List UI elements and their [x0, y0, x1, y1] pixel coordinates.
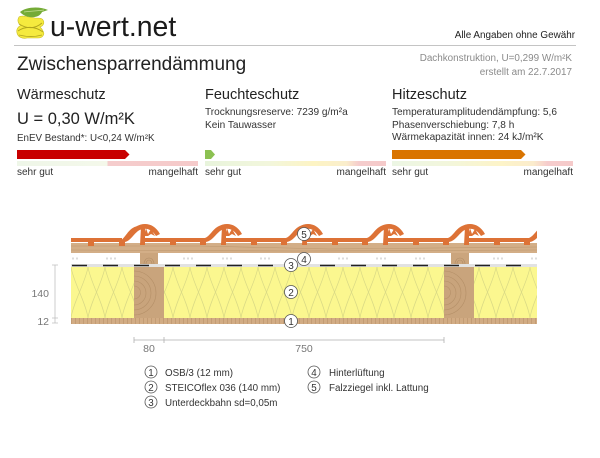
- label: sehr gut: sehr gut: [17, 167, 53, 178]
- horizontal dimension: [134, 337, 444, 355]
- heading: Wärmeschutz: Wärmeschutz: [17, 87, 106, 103]
- vertical dimension: 140: [31, 288, 49, 300]
- horizontal dimension: 80: [143, 343, 155, 355]
- EnEV note: EnEV Bestand*: U<0,24 W/m²K: [17, 133, 154, 144]
- logo wordmark: u-wert.net: [50, 11, 176, 43]
- heat details: Temperaturamplitudendämpfung: 5,6: [392, 107, 557, 118]
- marker 1: [284, 314, 298, 328]
- construction info: [420, 53, 572, 78]
- legend: Hinterlüftung: [329, 368, 385, 379]
- legend: 1: [148, 368, 154, 379]
- rating bar: red: [17, 150, 130, 159]
- panel: Hitzeschutz: [392, 87, 573, 178]
- roof cross-section diagram: [32, 224, 537, 408]
- legend: 4: [311, 368, 317, 379]
- legend: STEICOflex 036 (140 mm): [165, 383, 280, 394]
- OSB board: [71, 318, 537, 324]
- rating scale: [392, 161, 573, 166]
- construction info: Dachkonstruktion, U=0,299 W/m²K: [420, 53, 572, 64]
- rating scale: [205, 161, 386, 166]
- horizontal dimension: 750: [295, 343, 313, 355]
- marker 2: [284, 286, 298, 299]
- legend: 3: [148, 398, 154, 409]
- wooden roof battens: [71, 243, 537, 253]
- label: mangelhaft: mangelhaft: [337, 167, 386, 178]
- marker 1: 1: [288, 317, 294, 328]
- counter battens: [140, 253, 469, 265]
- heat details: [392, 107, 557, 143]
- legend: Unterdeckbahn sd=0,05m: [165, 398, 277, 409]
- rating scale: [17, 161, 198, 166]
- logo icon: insulation with leaf: [16, 8, 48, 39]
- header rule: [14, 45, 576, 46]
- panel: Wärmeschutz: [17, 87, 198, 178]
- ventilation dots: [72, 258, 537, 260]
- U value: U = 0,30 W/m²K: [17, 110, 135, 128]
- panel: Feuchteschutz: [205, 87, 386, 178]
- heading: Feuchteschutz: Feuchteschutz: [205, 87, 299, 103]
- heat details: Wärmekapazität innen: 24 kJ/m²K: [392, 132, 543, 143]
- underlay membrane: [71, 264, 537, 267]
- vertical dimension: [31, 265, 58, 328]
- legend: 5: [311, 383, 317, 394]
- label: sehr gut: sehr gut: [392, 167, 428, 178]
- moisture details: Trocknungsreserve: 7239 g/m²a: [205, 107, 348, 118]
- marker 4: 4: [301, 255, 307, 266]
- legend: Falzziegel inkl. Lattung: [329, 383, 429, 394]
- label: mangelhaft: mangelhaft: [149, 167, 198, 178]
- marker 4: [298, 252, 310, 266]
- insulation: [71, 267, 537, 318]
- heat details: Phasenverschiebung: 7,8 h: [392, 120, 514, 130]
- heading: Hitzeschutz: Hitzeschutz: [392, 87, 467, 103]
- label: mangelhaft: mangelhaft: [524, 167, 573, 178]
- disclaimer: Alle Angaben ohne Gewähr: [455, 30, 575, 41]
- title: Zwischensparrendämmung: [17, 54, 246, 75]
- marker 3: 3: [288, 261, 294, 272]
- construction info: erstellt am 22.7.2017: [480, 67, 572, 78]
- rafters: [134, 267, 474, 318]
- rating bar: green: [205, 150, 215, 159]
- rating bar: orange: [392, 150, 526, 159]
- marker 5: 5: [301, 230, 307, 241]
- legend: [145, 366, 429, 409]
- marker 5: [298, 228, 310, 241]
- legend: 2: [148, 383, 154, 394]
- vertical dimension: 12: [37, 316, 49, 328]
- legend: OSB/3 (12 mm): [165, 368, 233, 379]
- moisture details: Kein Tauwasser: [205, 120, 276, 130]
- marker 2: 2: [288, 288, 294, 299]
- tiles: [71, 224, 566, 246]
- marker 3: [284, 258, 298, 272]
- label: sehr gut: sehr gut: [205, 167, 241, 178]
- moisture details: [205, 107, 348, 130]
